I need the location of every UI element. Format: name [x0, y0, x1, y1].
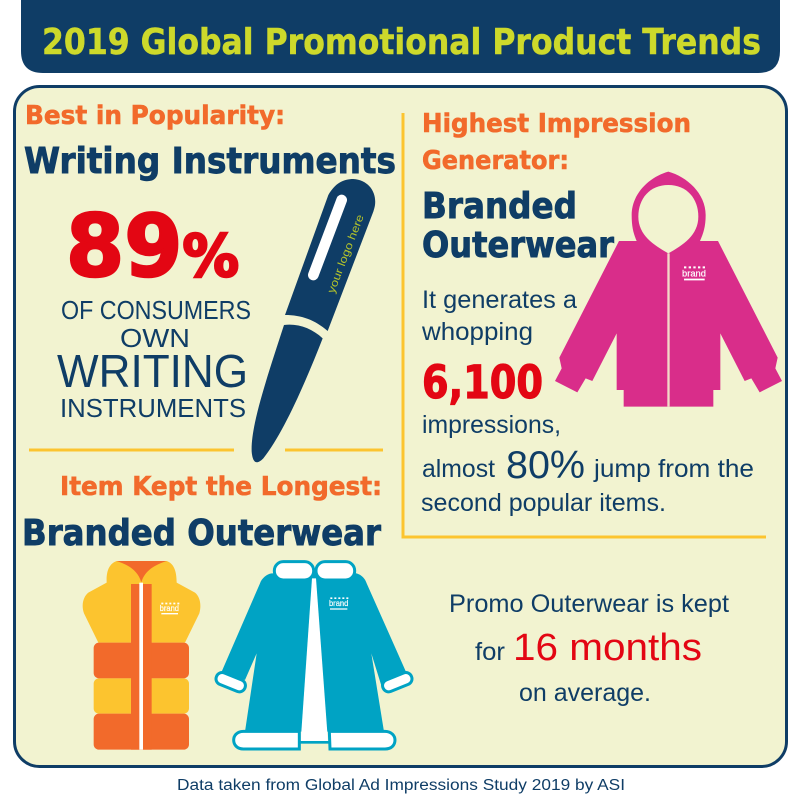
- text: promo outerwear duration: for: [475, 638, 505, 666]
- heading: highest impression generator: [422, 109, 691, 176]
- icon: pen: [252, 179, 375, 462]
- heading: writing instruments: Writing Instruments: [24, 141, 396, 182]
- icon: blue coat: brand: [329, 598, 349, 608]
- text: promo outerwear duration: Promo Outerwear is kept: [449, 590, 729, 618]
- text: impressions description: jump from the: [593, 455, 754, 483]
- text: of consumers own writing instruments: INSTRUMENTS: [60, 395, 246, 423]
- statistic: 89 percent: 89%: [66, 197, 239, 297]
- icon: pink hoodie: [555, 172, 782, 407]
- icon: orange vest: [83, 561, 200, 750]
- text: impressions description: almost: [422, 455, 495, 483]
- footer source note: Data taken from Global Ad Impressions Study 2019 by ASI: [177, 777, 625, 794]
- text: of consumers own writing instruments: OF CONSUMERS: [61, 297, 251, 325]
- heading: item kept the longest: Item Kept the Longest:: [60, 472, 382, 502]
- heading: branded outerwear: Branded: [422, 186, 577, 227]
- icon: pink hoodie: brand: [682, 268, 706, 278]
- panel: item kept the longest: [22, 472, 729, 750]
- text: impressions description: It generates a: [422, 286, 577, 314]
- text: impressions description: second popular items.: [421, 489, 666, 517]
- text: impressions description: 6,100: [422, 356, 543, 409]
- panel: highest impression generator: [421, 109, 782, 517]
- text: of consumers own writing instruments: OWN: [120, 325, 190, 353]
- heading: branded outerwear: Branded Outerwear: [22, 513, 381, 554]
- heading: branded outerwear: Outerwear: [422, 225, 614, 266]
- text: of consumers own writing instruments: [57, 297, 251, 423]
- text: of consumers own writing instruments: WRITING: [57, 345, 248, 397]
- panel: best in popularity: [24, 101, 396, 462]
- text: promo outerwear duration: 16 months: [513, 627, 702, 669]
- text: promo outerwear duration: [449, 590, 729, 707]
- heading: highest impression generator: Highest Impression: [422, 109, 691, 139]
- icon: blue coat: [214, 562, 414, 749]
- text: impressions description: whopping: [421, 318, 533, 346]
- heading: best in popularity: Best in Popularity:: [25, 101, 285, 131]
- text: impressions description: 80%: [506, 444, 585, 487]
- icon: orange vest: brand: [160, 603, 179, 613]
- heading: highest impression generator: Generator:: [422, 146, 569, 176]
- pen logo text: your logo here: [326, 213, 367, 295]
- text: promo outerwear duration: on average.: [519, 679, 651, 707]
- text: impressions description: impressions,: [422, 411, 561, 439]
- text: impressions description: [421, 286, 754, 517]
- heading: branded outerwear: [422, 186, 614, 266]
- header banner: [21, 0, 780, 73]
